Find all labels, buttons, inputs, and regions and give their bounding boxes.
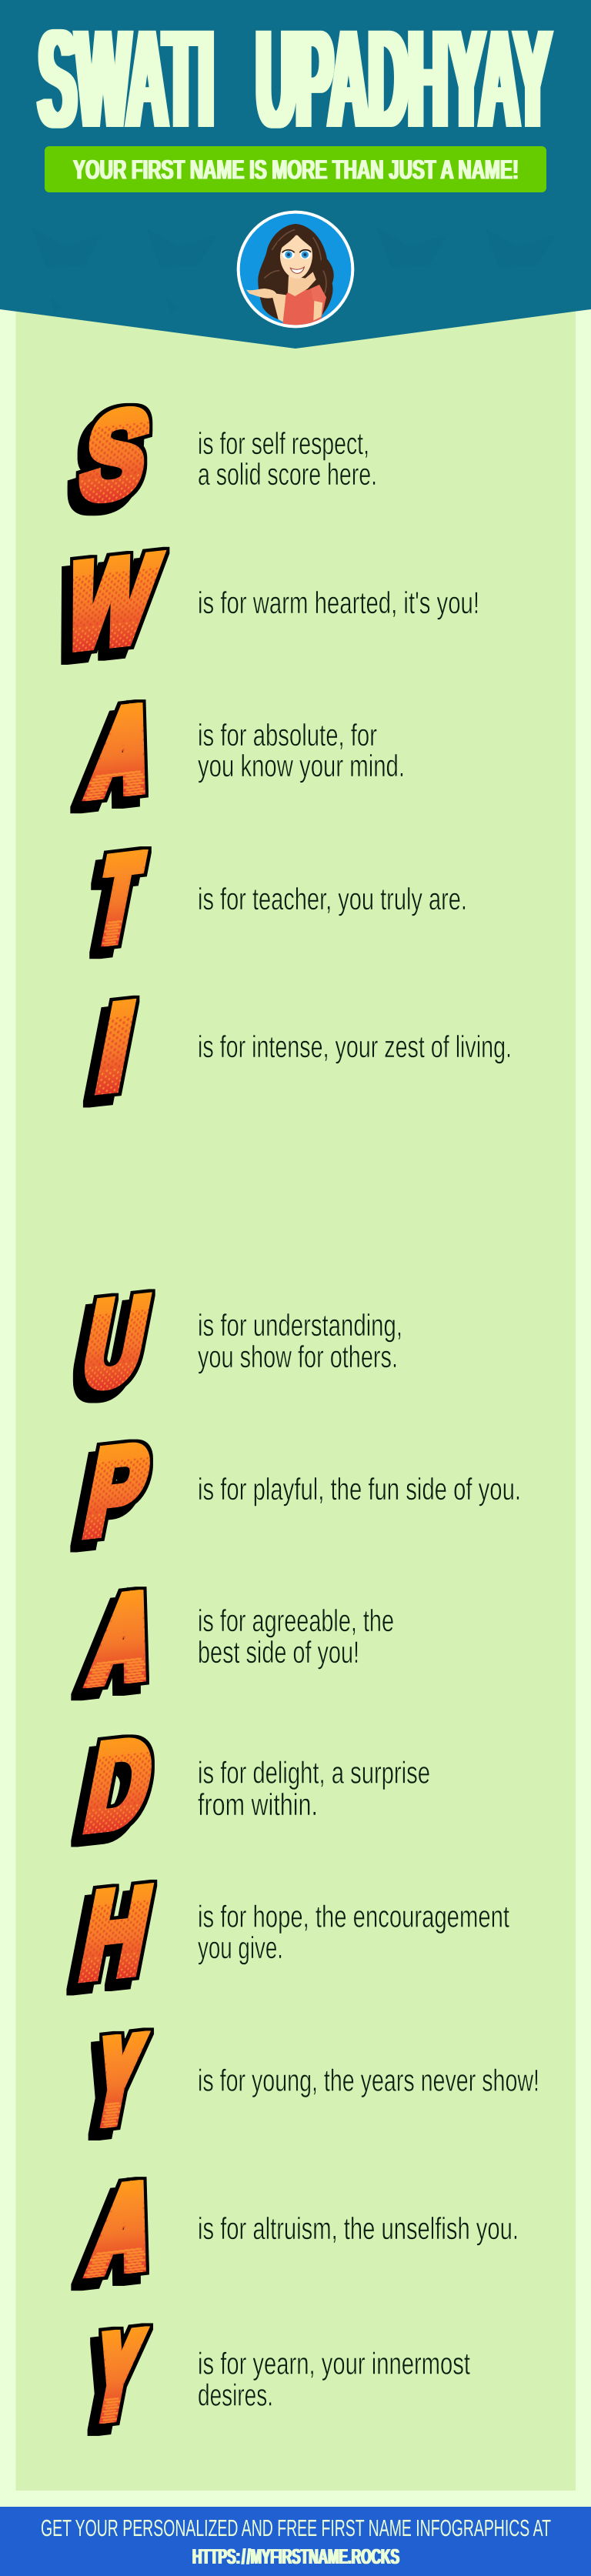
text: T: is for teacher, you truly are. bbox=[198, 883, 467, 916]
row: A bbox=[83, 1568, 394, 1709]
letter Y: Y bbox=[85, 2011, 149, 2151]
text: D bbox=[198, 1756, 430, 1822]
text: Y: is for yearn, your innermost bbox=[198, 2347, 470, 2381]
text: A: is for absolute, for bbox=[198, 719, 377, 752]
text: S bbox=[198, 427, 377, 492]
letter D: D bbox=[76, 1714, 162, 1857]
row: H bbox=[72, 1862, 509, 2004]
text: S: is for self respect, bbox=[198, 427, 369, 461]
row: D bbox=[76, 1714, 430, 1857]
letter U: U bbox=[73, 1271, 158, 1413]
letter Y: Y bbox=[85, 2307, 149, 2446]
letter A: A bbox=[83, 1568, 163, 1709]
footer url: HTTPS://MYFIRSTNAME.ROCKS bbox=[192, 2544, 399, 2568]
row: P bbox=[75, 1420, 521, 1561]
footer bbox=[0, 2507, 591, 2576]
row: U bbox=[73, 1271, 402, 1413]
text: A: best side of you! bbox=[198, 1636, 359, 1670]
text: Y bbox=[198, 2347, 470, 2413]
letter I: I bbox=[88, 978, 143, 1116]
text: H bbox=[198, 1900, 509, 1965]
row: W bbox=[55, 529, 479, 675]
tagline banner bbox=[45, 146, 546, 192]
letter A: A bbox=[82, 681, 162, 822]
row: A bbox=[82, 681, 405, 822]
text: D: is for delight, a surprise bbox=[198, 1756, 430, 1790]
letter P: P bbox=[75, 1420, 159, 1561]
row: T bbox=[88, 829, 467, 969]
text: U bbox=[198, 1309, 402, 1374]
letter A: A bbox=[83, 2158, 163, 2299]
row: Y bbox=[85, 2307, 470, 2446]
text: Y: desires. bbox=[198, 2379, 273, 2413]
text: A bbox=[198, 719, 405, 783]
text: S: a solid score here. bbox=[198, 458, 377, 492]
text: W: is for warm hearted, it's you! bbox=[198, 586, 479, 620]
row: Y bbox=[85, 2011, 539, 2151]
text: D: from within. bbox=[198, 1788, 318, 1822]
text: A: you know your mind. bbox=[198, 749, 405, 783]
icon: woman avatar in circle bbox=[237, 211, 354, 328]
title: SWATI bbox=[38, 0, 214, 157]
letter W: W bbox=[55, 529, 166, 675]
letter T: T bbox=[88, 829, 149, 969]
header banner bbox=[0, 0, 591, 349]
text: U: you show for others. bbox=[198, 1340, 398, 1374]
row: A bbox=[83, 2158, 519, 2299]
letter H: H bbox=[72, 1862, 160, 2004]
text: U: is for understanding, bbox=[198, 1309, 402, 1343]
row: I bbox=[88, 978, 512, 1116]
row: S bbox=[71, 384, 377, 526]
letter S: S bbox=[71, 384, 159, 526]
text: A bbox=[198, 1604, 394, 1670]
text: A: is for agreeable, the bbox=[198, 1604, 394, 1638]
text: H: you give. bbox=[198, 1931, 283, 1965]
